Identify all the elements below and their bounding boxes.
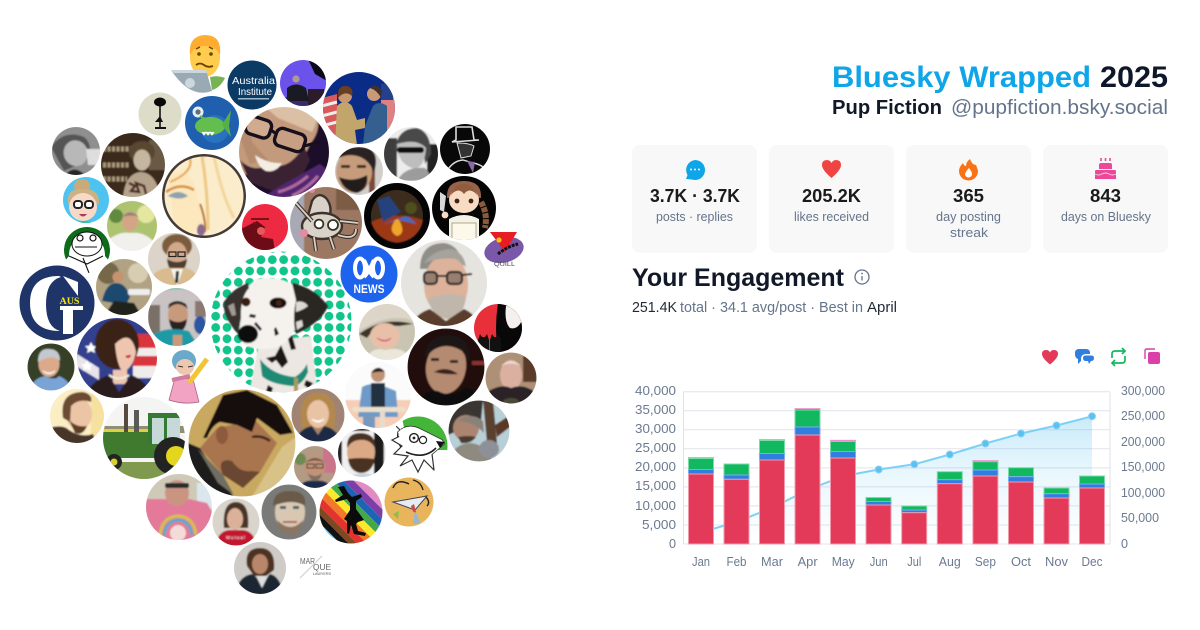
icon: replies legend bbox=[1075, 349, 1094, 364]
cumulative points bbox=[875, 413, 1096, 473]
cumulative line bbox=[701, 416, 1092, 532]
right axis labels: 150,000 bbox=[1121, 460, 1165, 474]
avatar: pride stripes and woman silhouette bbox=[294, 457, 406, 569]
avatar: frog line drawing bbox=[63, 226, 111, 274]
bar: Nov bbox=[1044, 488, 1069, 544]
engagement chart bbox=[635, 384, 1165, 569]
right axis labels: 0 bbox=[1121, 537, 1128, 551]
bar: Jul bbox=[902, 506, 927, 544]
month labels: Apr bbox=[798, 555, 818, 569]
section heading: Your Engagement: Your Engagement bbox=[632, 264, 845, 292]
right axis labels: 200,000 bbox=[1121, 435, 1165, 449]
avatar: man with moustache in dark bar bbox=[407, 328, 486, 406]
left axis labels: 0 bbox=[669, 537, 676, 551]
avatar: stick figure on beige bbox=[138, 92, 182, 136]
avatar: woman in wide hat bbox=[358, 303, 416, 361]
stat card: posts and replies: 3.7K · 3.7K bbox=[650, 185, 741, 206]
avatar: man in pink unicorn t-shirt bbox=[145, 473, 213, 541]
engagement summary line: 251.4K bbox=[632, 300, 677, 316]
avatar: chibi chef with knife bbox=[431, 175, 497, 241]
left axis labels: 40,000 bbox=[635, 384, 676, 398]
left axis labels: 15,000 bbox=[635, 479, 676, 493]
cumulative area bbox=[701, 416, 1092, 544]
icon: reposts legend bbox=[1112, 348, 1125, 366]
avatar: smiling man with glasses in navy shirt bbox=[293, 445, 337, 489]
stacked bars bbox=[688, 408, 1104, 544]
engagement summary line: total · 34.1 avg/post · Best in bbox=[680, 300, 863, 316]
bar: Feb bbox=[724, 464, 749, 544]
avatar: bearded man with dark hair bbox=[334, 146, 384, 197]
stat card: likes received: likes received bbox=[794, 210, 869, 224]
stat card: day posting streak bbox=[906, 145, 1031, 253]
stat card: posts and replies: posts · replies bbox=[656, 210, 733, 224]
avatar: woman in dark sunglasses, black and white bbox=[383, 126, 439, 182]
avatar: older man with white hair smiling bbox=[27, 343, 75, 391]
avatar: person in red t-shirt bbox=[212, 498, 260, 546]
avatar: photographer among trees bbox=[95, 258, 153, 316]
icon: info bbox=[855, 270, 869, 284]
avatar: man in profile with brown hair and beard bbox=[49, 388, 105, 444]
avatar: woman in black jacket bbox=[233, 541, 287, 595]
avatar: woman with pearls before US flag bbox=[76, 317, 158, 399]
avatar: Guardian Australia logo bbox=[19, 265, 95, 341]
avatar: Quill logo bbox=[482, 232, 526, 268]
bar: Sep bbox=[973, 460, 998, 544]
avatar: cartoon wolf line drawing bbox=[388, 416, 448, 476]
chart grid bbox=[684, 392, 1110, 544]
avatar: blonde woman eye illustration bbox=[161, 153, 247, 239]
avatar: mosaic portrait on brick wall bbox=[261, 484, 317, 540]
avatar: Marque Lawyers logo: MAR bbox=[300, 557, 315, 566]
title: 2025 bbox=[1100, 61, 1168, 94]
avatar: worried emoji with laptop bbox=[171, 35, 225, 93]
bar: Oct bbox=[1008, 468, 1034, 544]
bar: May bbox=[830, 440, 856, 544]
chart legend icons bbox=[1042, 348, 1160, 366]
month labels: Jun bbox=[870, 555, 888, 569]
icon: heart bbox=[822, 160, 841, 178]
icon: birthday cake bbox=[1095, 163, 1116, 179]
avatar: curly-haired man with glasses and coat bbox=[147, 232, 201, 286]
title: Bluesky Wrapped bbox=[832, 61, 1091, 94]
month labels bbox=[692, 555, 1102, 569]
stat card: days on Bluesky: 843 bbox=[1090, 185, 1121, 206]
icon: quotes legend bbox=[1145, 349, 1160, 364]
avatar: person in red t-shirt: Mutual bbox=[226, 535, 245, 540]
avatar: martini cartoon bbox=[384, 477, 434, 527]
avatar: red and dark duotone bbox=[241, 203, 289, 251]
avatar: Quill logo: QUILL bbox=[494, 261, 515, 268]
left axis labels: 30,000 bbox=[635, 422, 676, 436]
month labels: Oct bbox=[1011, 555, 1032, 569]
avatar: red and black illustration with cats bbox=[473, 303, 523, 353]
avatar: grey-haired man with glasses bbox=[400, 239, 488, 327]
right axis labels: 300,000 bbox=[1121, 384, 1165, 398]
avatar: ABC News logo: NEWS bbox=[354, 284, 385, 296]
avatar: man in profile looking down bbox=[188, 389, 296, 497]
month labels: Jul bbox=[907, 555, 921, 569]
avatar: black and white woman bbox=[51, 126, 101, 176]
avatar: Marque Lawyers logo: LAWYERS bbox=[313, 572, 332, 576]
profile name and handle bbox=[832, 96, 1168, 119]
avatar: bearded man in teal shirt bbox=[147, 287, 207, 347]
profile name and handle: @pupfiction.bsky.social bbox=[951, 96, 1168, 119]
avatar: man in denim shirt at cafe table bbox=[346, 366, 410, 428]
avatar bubble cluster bbox=[19, 35, 537, 595]
avatar: cartoon grandma with pencil bbox=[169, 350, 207, 403]
bar: Jan bbox=[688, 458, 714, 544]
icon: heart legend bbox=[1042, 350, 1058, 364]
left axis labels: 10,000 bbox=[635, 499, 676, 513]
month labels: Feb bbox=[726, 555, 747, 569]
bar: Aug bbox=[937, 472, 962, 544]
engagement summary line: April bbox=[867, 300, 897, 316]
avatar: woman before bookshelves, sepia bbox=[100, 132, 166, 198]
icon: speech bubble bbox=[686, 160, 705, 180]
avatar: Marque Lawyers logo: QUE bbox=[313, 563, 331, 572]
avatar: The Australia Institute logo: Australia bbox=[232, 76, 275, 87]
avatar: speaker on purple stage bbox=[279, 59, 327, 107]
month labels: Mar bbox=[761, 555, 783, 569]
avatar: The Australia Institute logo: Institute bbox=[238, 87, 272, 98]
avatar: dalmatian on green polka dots bbox=[210, 251, 352, 394]
avatar: ABC News logo bbox=[340, 245, 398, 303]
stat card: posts and replies bbox=[632, 145, 757, 253]
profile name and handle: Pup Fiction bbox=[832, 96, 942, 119]
left axis labels: 5,000 bbox=[642, 518, 676, 532]
bar: Jun bbox=[866, 498, 891, 544]
avatar: noir man in hat bbox=[439, 123, 491, 175]
left axis labels bbox=[635, 384, 676, 551]
month labels: Dec bbox=[1082, 555, 1102, 569]
bar: Mar bbox=[760, 440, 784, 544]
avatar: memoji with glasses and bun bbox=[63, 177, 109, 223]
right axis labels bbox=[1121, 384, 1165, 551]
avatar: Marque Lawyers logo bbox=[300, 556, 332, 578]
right axis labels: 100,000 bbox=[1121, 486, 1165, 500]
bar: Dec bbox=[1080, 476, 1104, 544]
stat card: days on Bluesky bbox=[1043, 145, 1168, 253]
month labels: Nov bbox=[1045, 555, 1069, 569]
stat card: day posting streak: day posting bbox=[936, 210, 1001, 224]
left axis labels: 20,000 bbox=[635, 460, 676, 474]
month labels: May bbox=[832, 555, 855, 569]
month labels: Aug bbox=[939, 555, 961, 569]
engagement summary line bbox=[632, 300, 897, 316]
avatar: man in white shirt among foliage bbox=[106, 200, 158, 252]
avatar: green fish on blue bbox=[184, 95, 240, 151]
stat card: likes received: 205.2K bbox=[802, 185, 862, 206]
avatar: cartoon rabbit graffiti bbox=[289, 186, 363, 260]
icon: flame bbox=[959, 159, 978, 180]
avatar: The Australia Institute logo bbox=[227, 60, 277, 110]
avatar: smiling man with glasses, purple tint bbox=[238, 106, 330, 198]
left axis labels: 25,000 bbox=[635, 441, 676, 455]
avatar: man with koala bbox=[448, 400, 510, 462]
avatar: two figures shaking hands before flags bbox=[322, 71, 396, 145]
stat card: likes received bbox=[769, 145, 894, 253]
avatar: bald man smiling bbox=[485, 352, 537, 406]
left axis labels: 35,000 bbox=[635, 403, 676, 417]
stat card: days on Bluesky: days on Bluesky bbox=[1061, 210, 1152, 224]
month labels: Sep bbox=[975, 555, 996, 569]
avatar: man with stubble bbox=[337, 428, 387, 481]
month labels: Jan bbox=[692, 555, 710, 569]
avatar: smiling woman with blonde hair bbox=[291, 388, 345, 442]
right axis labels: 50,000 bbox=[1121, 511, 1159, 525]
avatar: circular painting of figure in flames bbox=[363, 182, 431, 250]
right axis labels: 250,000 bbox=[1121, 409, 1165, 423]
stat card: day posting streak: 365 bbox=[953, 185, 984, 206]
avatar: Guardian Australia logo: AUS bbox=[60, 297, 80, 307]
bar: Apr bbox=[795, 408, 820, 544]
avatar: green tractor bbox=[103, 397, 185, 479]
stat card: day posting streak: streak bbox=[950, 226, 989, 240]
